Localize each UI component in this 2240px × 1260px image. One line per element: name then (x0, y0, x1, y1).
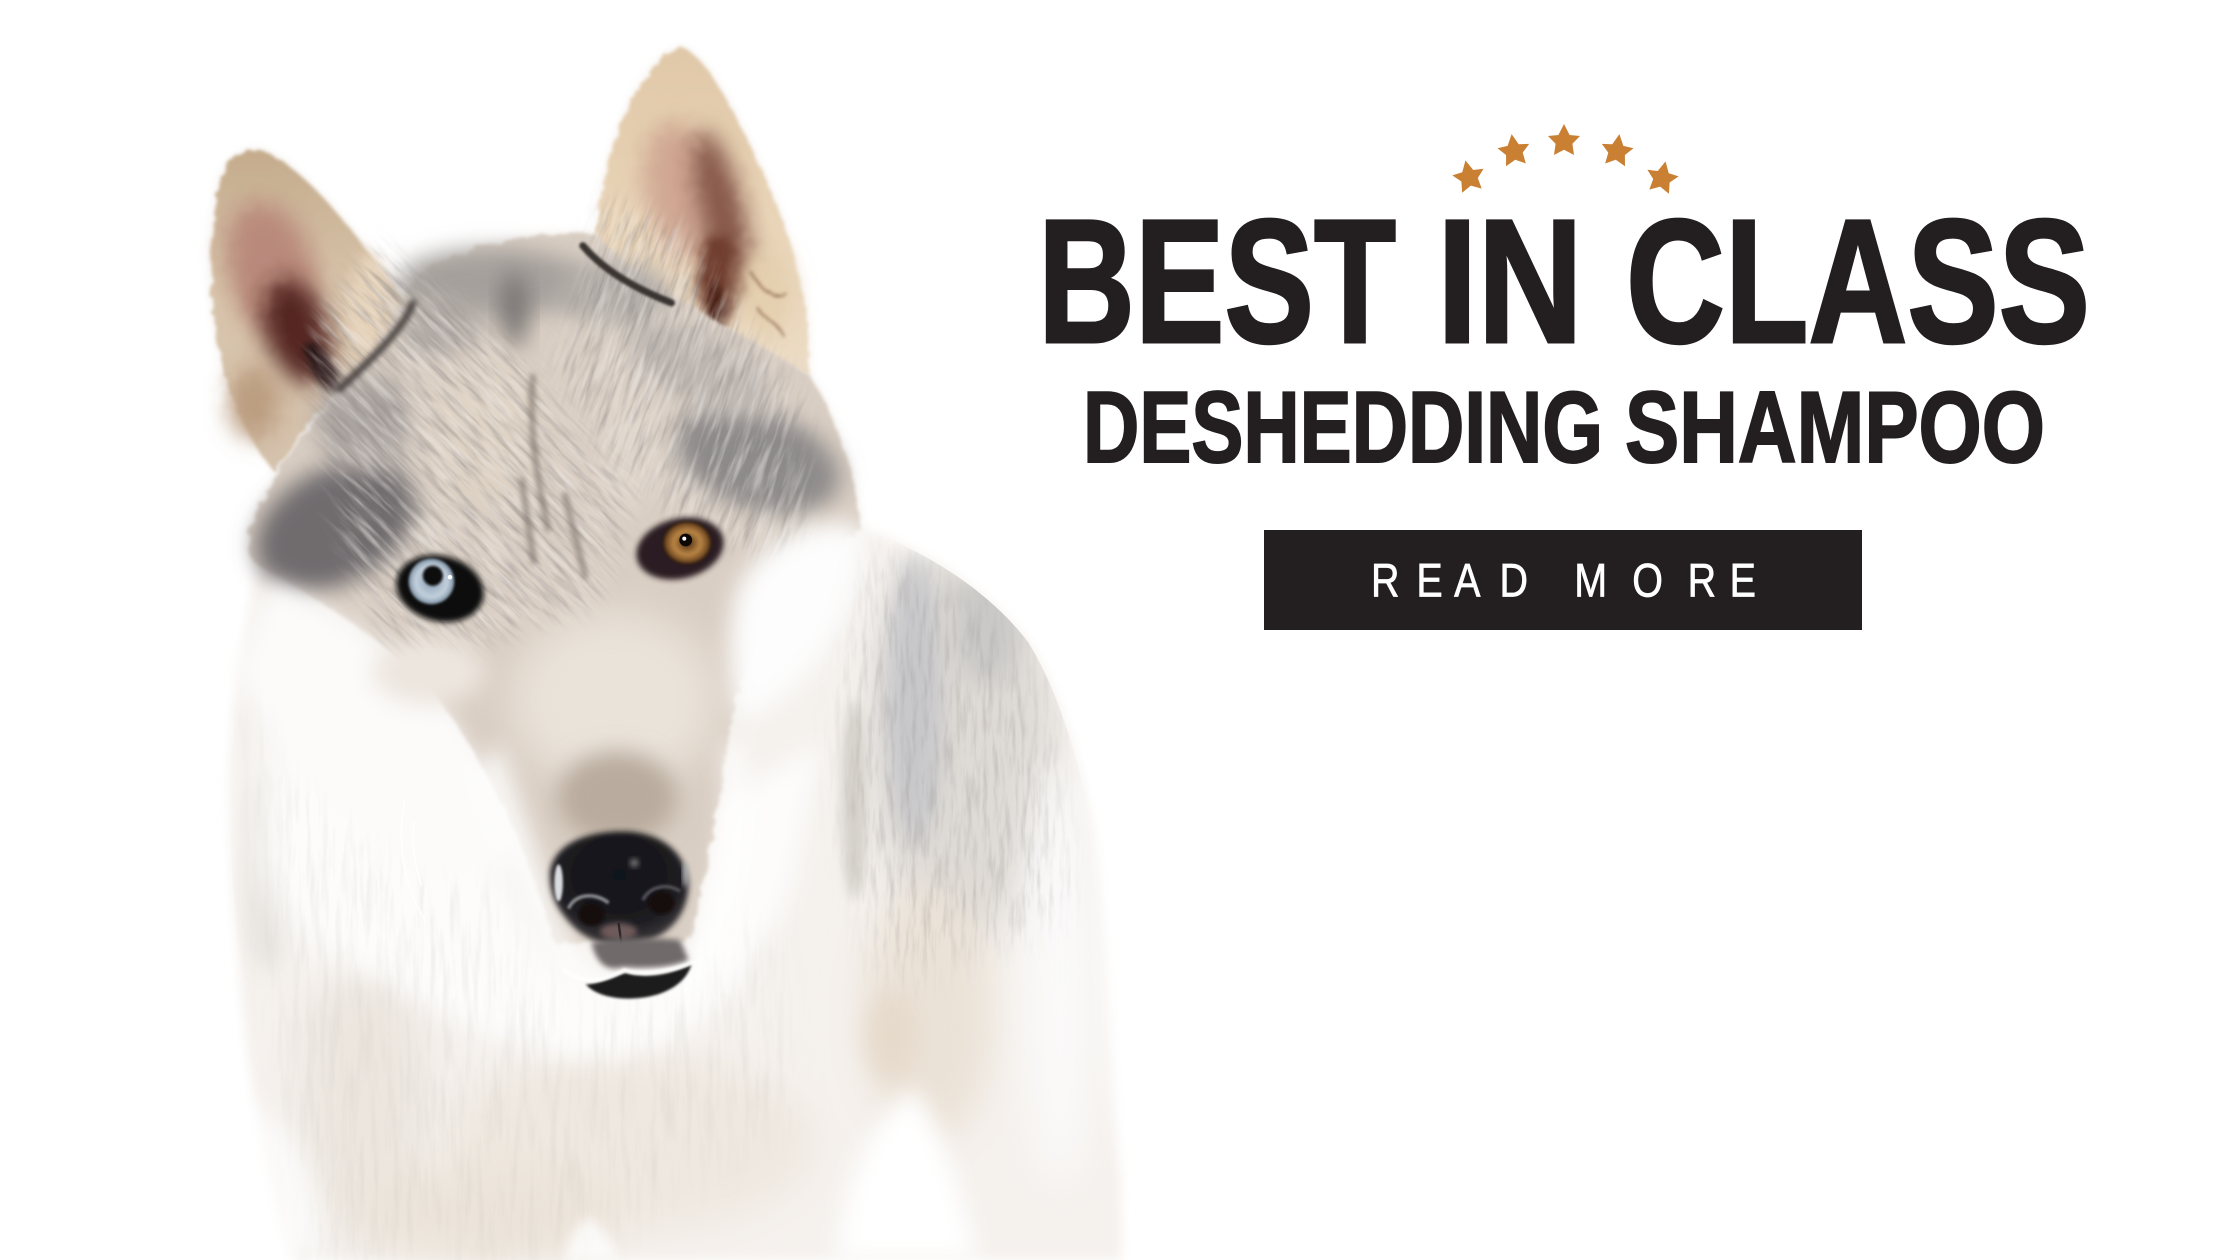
star 1 (1450, 157, 1488, 194)
heading: best in class: IN (1437, 184, 1583, 380)
head and face fur (239, 198, 862, 944)
nose (550, 831, 689, 954)
right ear (597, 47, 809, 374)
star 4 (1599, 132, 1635, 167)
gap between the legs (836, 1089, 977, 1260)
subheading: deshedding shampoo: DESHEDDING (1083, 372, 1603, 484)
photo: husky dog (206, 44, 1122, 1260)
white ruff at cheek (730, 523, 862, 721)
heading: best in class (1038, 184, 2090, 380)
heading: best in class: BEST (1038, 184, 1396, 380)
right amber eye (630, 509, 730, 588)
cheek white (236, 586, 514, 886)
button: read more (1264, 530, 1862, 630)
left ear (211, 150, 407, 471)
button: read more: READ MORE (1371, 555, 1756, 607)
ear base dark fur lines (340, 246, 671, 389)
star 2 (1496, 132, 1532, 167)
star arc rating (1450, 124, 1681, 195)
left blue eye (389, 546, 491, 631)
grey markings (233, 249, 854, 616)
muzzle and cheek shading (401, 743, 744, 1000)
mouth (563, 938, 696, 999)
heading: best in class: CLASS (1626, 184, 2090, 380)
dog body and silhouette (230, 76, 1122, 1260)
subheading: deshedding shampoo: SHAMPOO (1625, 372, 2045, 484)
star 5 (1643, 158, 1681, 195)
star 3 (1548, 124, 1580, 155)
